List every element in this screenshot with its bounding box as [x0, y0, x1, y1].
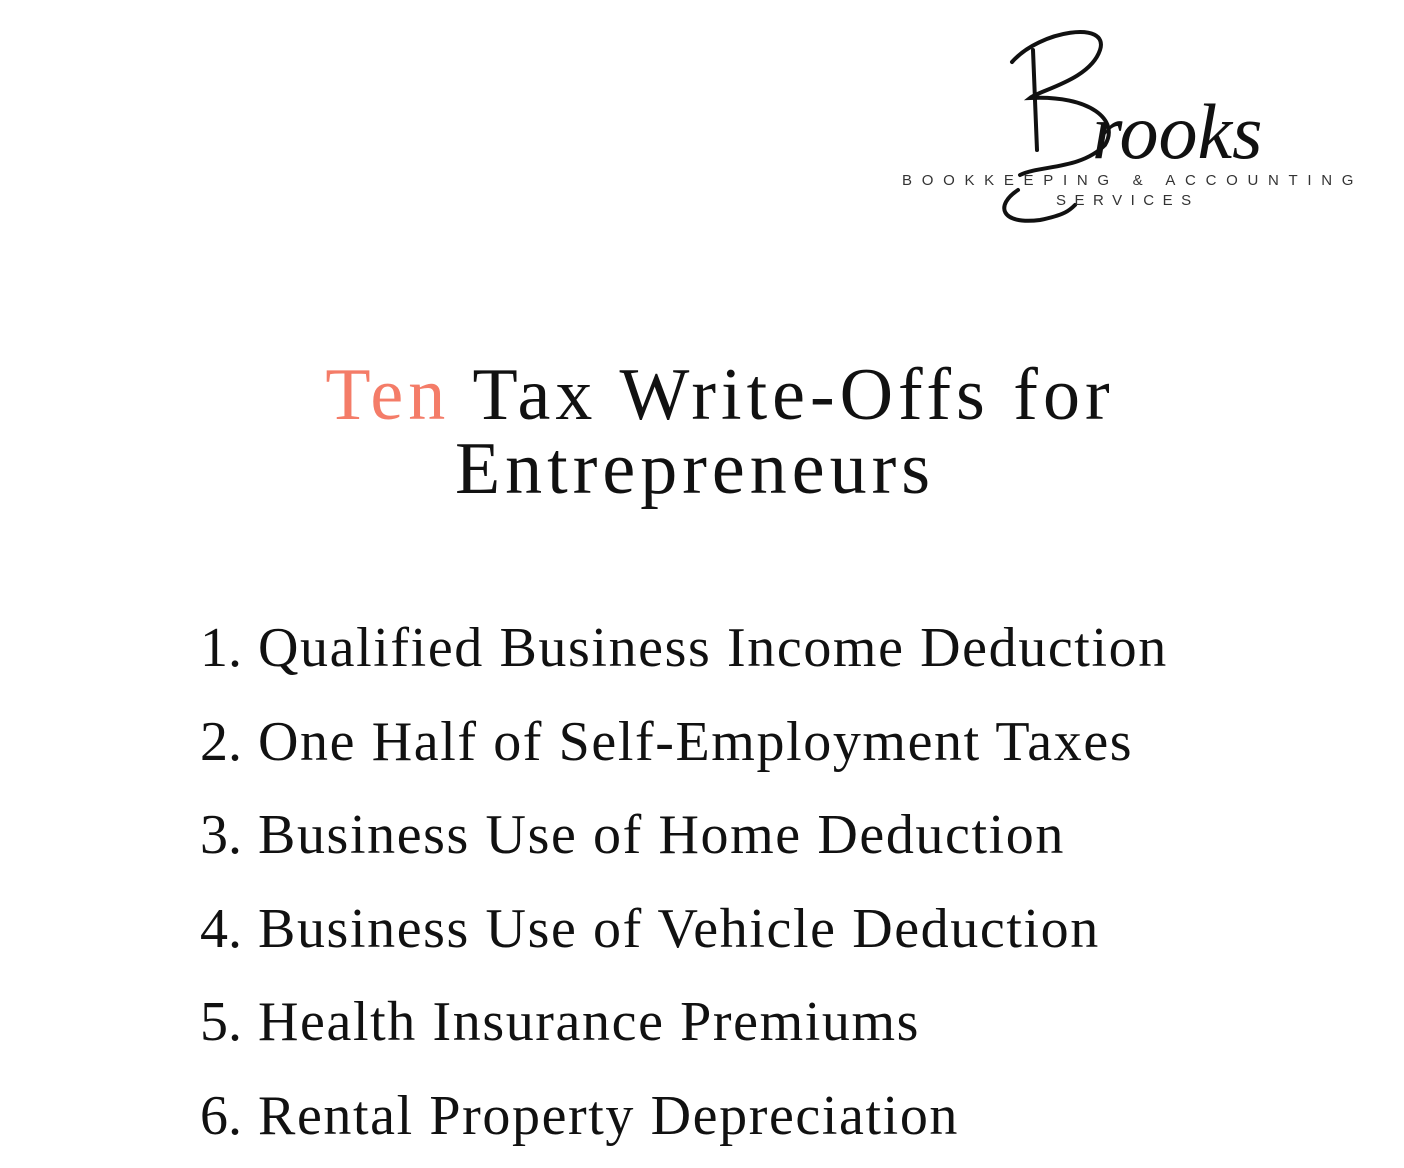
title: Entrepreneurs — [455, 428, 935, 510]
item 5: 5. — [200, 991, 242, 1053]
item 4: 4. — [200, 898, 242, 960]
item 6: 6. — [200, 1085, 242, 1147]
logo subtitle: BOOKKEEPING & ACCOUNTING — [902, 172, 1363, 189]
item 3: Business Use of Home Deduction — [258, 804, 1065, 866]
list of write-offs — [200, 617, 1168, 1147]
item 6: Rental Property Depreciation — [258, 1085, 959, 1147]
item 4: Business Use of Vehicle Deduction — [258, 898, 1100, 960]
logo: SERVICES — [1056, 192, 1200, 209]
logo name: rooks — [1092, 88, 1262, 175]
title — [325, 354, 1115, 510]
item 2: 2. — [200, 711, 242, 773]
logo — [902, 30, 1363, 223]
item 1: Qualified Business Income Deduction — [258, 617, 1168, 679]
item 3: 3. — [200, 804, 242, 866]
item 1: 1. — [200, 617, 242, 679]
title: Ten Tax Write-Offs for — [325, 354, 1115, 436]
logo script decoration — [1004, 32, 1109, 221]
item 2: One Half of Self-Employment Taxes — [258, 711, 1133, 773]
item 5: Health Insurance Premiums — [258, 991, 920, 1053]
